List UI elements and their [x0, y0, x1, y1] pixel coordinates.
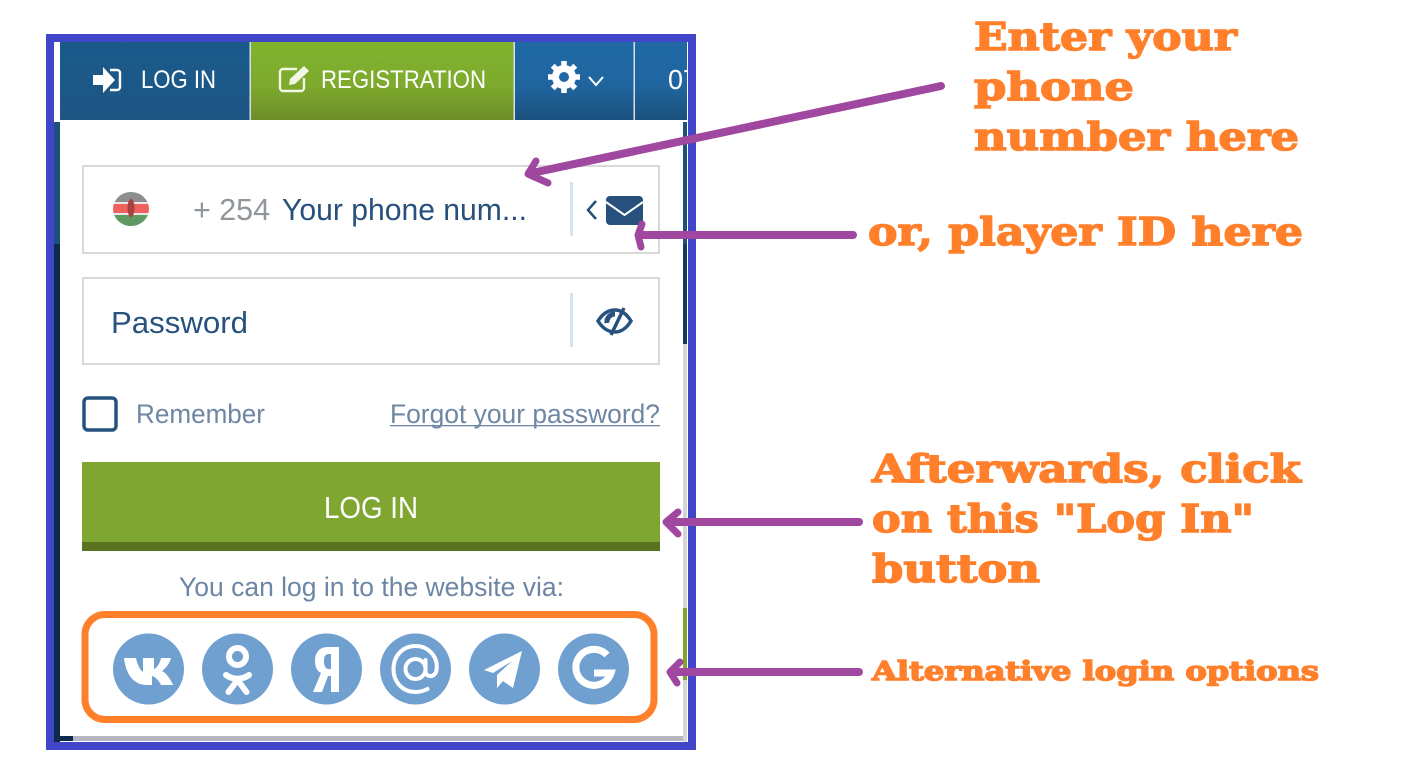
- tab: registration: REGISTRATION: [321, 66, 486, 94]
- tab: number: [635, 42, 687, 120]
- icon: hidden eye: [598, 308, 631, 335]
- arrow: to phone field: [528, 86, 941, 183]
- icon: VK: [113, 634, 184, 704]
- icon: Mail.ru at sign: [380, 634, 451, 704]
- background strips: [54, 122, 687, 742]
- icon: Yandex: [291, 634, 362, 704]
- callout: click log in: [871, 446, 1302, 591]
- phone input field: [83, 166, 659, 253]
- icon: Odnoklassniki: [202, 634, 273, 704]
- icon: sign in: [93, 67, 120, 93]
- remember checkbox: Remember: [136, 399, 265, 429]
- social login options: [85, 614, 654, 720]
- log in button: [82, 462, 660, 551]
- login via caption: You can log in to the website via:: [179, 572, 564, 602]
- tab: log in: [60, 42, 250, 120]
- arrow: to player ID icon: [638, 224, 853, 247]
- callout: enter phone number: phone: [974, 64, 1134, 109]
- white form card: [60, 120, 683, 736]
- top navigation tabs: [60, 42, 698, 120]
- tab: number: 07: [668, 64, 698, 95]
- icon: Kenya flag: [113, 192, 149, 226]
- panel: login screenshot: [50, 38, 698, 746]
- orange highlight box: [85, 614, 654, 720]
- password input field: [83, 278, 659, 364]
- icon: edit: [280, 66, 309, 91]
- tab: settings: [514, 42, 634, 120]
- callout: click log in: Afterwards, click: [871, 446, 1302, 491]
- callout: click log in: on this "Log In": [872, 496, 1254, 541]
- icon: gear: [548, 61, 580, 93]
- icon: chevron left: [588, 201, 596, 219]
- callout: enter phone number: [974, 14, 1299, 159]
- callout: click log in: button: [872, 546, 1040, 591]
- forgot password link: Forgot your password?: [390, 399, 660, 429]
- arrow: to alternative logins: [670, 662, 859, 683]
- callout: enter phone number: number here: [974, 114, 1299, 159]
- blue frame: [50, 38, 692, 746]
- log in button: LOG IN: [324, 490, 418, 525]
- phone input field: + 254: [193, 192, 270, 227]
- callout: enter phone number: Enter your: [974, 14, 1238, 59]
- icon: Telegram: [469, 634, 540, 704]
- phone input field: Your phone num...: [282, 192, 527, 227]
- icon: chevron: [589, 77, 603, 85]
- icon: envelope: [606, 196, 643, 225]
- password input field: Password: [111, 305, 248, 340]
- tab: registration: [250, 42, 514, 120]
- remember checkbox: [84, 398, 265, 430]
- callout: alternative login options: Alternative login options: [871, 657, 1319, 687]
- arrow: to log in button: [666, 512, 859, 534]
- callout: player ID: or, player ID here: [868, 209, 1303, 254]
- icon: Google: [558, 634, 629, 704]
- tab: log in: LOG IN: [141, 66, 216, 94]
